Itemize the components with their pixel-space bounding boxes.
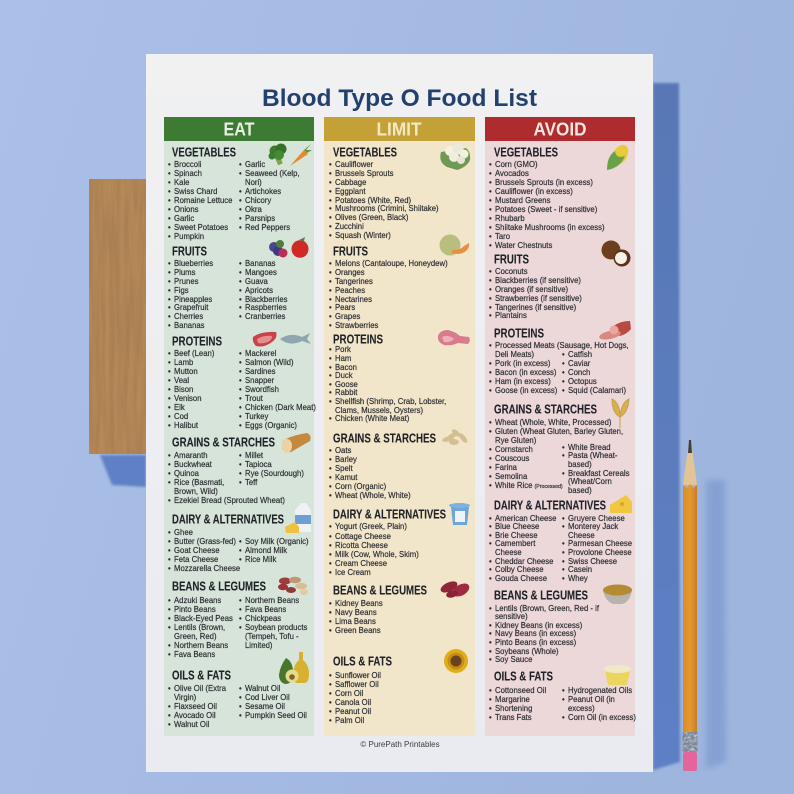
- limit fruits: Strawberries: [335, 320, 379, 330]
- eat proteins: Snapper: [245, 375, 274, 385]
- eat dairy and alternatives: Ghee: [174, 527, 193, 537]
- limit dairy and alternatives: Yogurt (Greek, Plain): [335, 521, 407, 531]
- eat beans and legumes: Soybean products: [245, 622, 307, 632]
- limit grains and starches: Oats: [335, 445, 352, 455]
- avoid beans and legumes: Pinto Beans (in excess): [495, 637, 576, 647]
- eat proteins: Salmon (Wild): [245, 357, 294, 367]
- limit beans and legumes: Green Beans: [335, 625, 381, 635]
- eat grains and starches: Millet: [245, 450, 263, 460]
- avoid vegetables: Cauliflower (in excess): [495, 186, 573, 196]
- icon: margarine tub: [602, 663, 632, 686]
- eat proteins: Bison: [174, 384, 193, 394]
- eat fruits: Blueberries: [174, 258, 213, 268]
- limit oils and fats: Corn Oil: [335, 688, 364, 698]
- eat vegetables: Chicory: [245, 195, 271, 205]
- eat proteins: Veal: [174, 375, 189, 385]
- limit vegetables: Brussels Sprouts: [335, 168, 394, 178]
- avoid dairy and alternatives: Blue Cheese: [495, 521, 539, 531]
- eat oils and fats: Cod Liver Oil: [245, 692, 290, 702]
- avoid beans and legumes: Soybeans (Whole): [495, 646, 559, 656]
- eat grains and starches: Quinoa: [174, 468, 199, 478]
- eat grains and starches: Ezekiel Bread (Sprouted Wheat): [174, 495, 285, 505]
- limit grains and starches: Spelt: [335, 463, 353, 473]
- limit proteins: Ham: [335, 353, 352, 363]
- limit vegetables: Zucchini: [335, 221, 364, 231]
- eat proteins: [168, 332, 316, 430]
- limit fruits: Tangerines: [335, 276, 373, 286]
- avoid grains and starches: GRAINS & STARCHES: [494, 402, 597, 416]
- limit grains and starches: [329, 429, 468, 500]
- avoid beans and legumes: Kidney Beans (in excess): [495, 620, 582, 630]
- avoid proteins: Catfish: [568, 349, 592, 359]
- icon: cheese wedge: [609, 494, 633, 514]
- footer credit: © PurePath Printables: [360, 740, 440, 749]
- avoid grains and starches: Semolina: [495, 471, 527, 481]
- wood block shadow: [100, 455, 146, 487]
- avoid vegetables: VEGETABLES: [494, 146, 558, 160]
- avoid fruits: FRUITS: [494, 252, 529, 266]
- eat dairy and alternatives: [168, 503, 311, 573]
- avoid fruits: Coconuts: [495, 266, 528, 276]
- eat beans and legumes: Pinto Beans: [174, 604, 215, 614]
- limit oils and fats: Safflower Oil: [335, 679, 379, 689]
- limit oils and fats: Peanut Oil: [335, 706, 371, 716]
- panel: avoid: [485, 117, 635, 736]
- limit proteins: Shellfish (Shrimp, Crab, Lobster,: [335, 396, 447, 406]
- avoid dairy and alternatives: [485, 497, 635, 585]
- avoid fruits: Strawberries (if sensitive): [495, 293, 582, 303]
- eat grains and starches: Brown, Wild): [174, 486, 218, 496]
- avoid beans and legumes: [485, 587, 635, 665]
- eat column content: [168, 144, 316, 729]
- limit proteins: Clams, Mussels, Oysters): [335, 405, 423, 415]
- avoid grains and starches: Breakfast Cereals: [568, 468, 630, 478]
- limit column content: [329, 144, 470, 725]
- eat header band: [164, 117, 314, 141]
- limit beans and legumes: Navy Beans: [335, 607, 377, 617]
- eat proteins: Swordfish: [245, 384, 279, 394]
- avoid oils and fats: Margarine: [495, 694, 530, 704]
- limit vegetables: Olives (Green, Black): [335, 212, 409, 222]
- avoid grains and starches: based): [568, 485, 592, 495]
- limit fruits: Oranges: [335, 267, 365, 277]
- icon: avocado and oil bottle: [279, 652, 309, 684]
- avoid oils and fats: Corn Oil (in excess): [568, 712, 636, 722]
- panel: eat: [164, 117, 314, 736]
- wooden block: [89, 179, 146, 454]
- avoid proteins: PROTEINS: [494, 326, 544, 340]
- avoid vegetables: [489, 144, 628, 250]
- icon: pork cut: [438, 330, 470, 346]
- eat proteins: Halibut: [174, 420, 198, 430]
- eat beans and legumes: Black-Eyed Peas: [174, 613, 233, 623]
- eat vegetables: [168, 144, 312, 241]
- eat fruits: Apricots: [245, 285, 273, 295]
- avoid column content: [489, 144, 636, 722]
- eat proteins: Mutton: [174, 366, 197, 376]
- limit grains and starches: Corn (Organic): [335, 481, 386, 491]
- avoid proteins: Squid (Calamari): [568, 385, 626, 395]
- avoid fruits: Oranges (if sensitive): [495, 284, 568, 294]
- eat vegetables: Garlic: [174, 213, 194, 223]
- eat proteins: Venison: [174, 393, 201, 403]
- eat proteins: Turkey: [245, 411, 268, 421]
- avoid vegetables: Taro: [495, 231, 510, 241]
- eat fruits: [168, 237, 308, 330]
- avoid dairy and alternatives: Provolone Cheese: [568, 547, 632, 557]
- limit proteins: [329, 330, 470, 423]
- avoid proteins: Pork (in excess): [495, 358, 550, 368]
- eat grains and starches: Teff: [245, 477, 257, 487]
- panel: limit: [324, 117, 475, 736]
- title: Blood Type O Food List: [262, 85, 537, 112]
- avoid grains and starches: Couscous: [495, 453, 529, 463]
- avoid grains and starches: White Rice (Processed): [495, 480, 563, 490]
- eat vegetables: Red Peppers: [245, 222, 290, 232]
- eat grains and starches: GRAINS & STARCHES: [172, 436, 275, 450]
- avoid fruits: Tangerines (if sensitive): [495, 302, 576, 312]
- eat beans and legumes: Lentils (Brown,: [174, 622, 225, 632]
- eat grains and starches: Amaranth: [174, 450, 207, 460]
- eat fruits: Grapefruit: [174, 302, 208, 312]
- eat vegetables: Spinach: [174, 168, 202, 178]
- eat oils and fats: Walnut Oil: [245, 683, 280, 693]
- limit vegetables: Cauliflower: [335, 159, 374, 169]
- eat dairy and alternatives: Mozzarella Cheese: [174, 563, 240, 573]
- eat oils and fats: Sesame Oil: [245, 701, 285, 711]
- eat header band: EAT: [224, 120, 254, 140]
- avoid dairy and alternatives: Gouda Cheese: [495, 573, 547, 583]
- icon: cauliflower: [440, 144, 470, 170]
- icon: yogurt cup: [449, 503, 470, 525]
- avoid grains and starches: (Wheat/Corn: [568, 476, 612, 486]
- eat dairy and alternatives: Almond Milk: [245, 545, 287, 555]
- limit grains and starches: Wheat (Whole, White): [335, 490, 411, 500]
- avoid vegetables: Shiitake Mushrooms (in excess): [495, 222, 605, 232]
- limit oils and fats: Sunflower Oil: [335, 670, 381, 680]
- eat beans and legumes: Northern Beans: [245, 595, 299, 605]
- avoid grains and starches: Pasta (Wheat-: [568, 450, 618, 460]
- eat oils and fats: OILS & FATS: [172, 668, 231, 682]
- avoid vegetables: Mustard Greens: [495, 195, 550, 205]
- avoid oils and fats: Cottonseed Oil: [495, 685, 546, 695]
- eat vegetables: VEGETABLES: [172, 146, 236, 160]
- avoid vegetables: Corn (GMO): [495, 159, 538, 169]
- avoid dairy and alternatives: American Cheese: [495, 513, 556, 523]
- eat proteins: Eggs (Organic): [245, 420, 297, 430]
- icon: assorted beans: [278, 576, 308, 595]
- avoid fruits: Plantains: [495, 310, 527, 320]
- eat fruits: Figs: [174, 285, 188, 295]
- limit header band: LIMIT: [376, 120, 422, 140]
- icon: corn: [607, 144, 628, 170]
- limit proteins: PROTEINS: [333, 332, 383, 346]
- icon: broccoli and carrot: [268, 144, 312, 166]
- limit dairy and alternatives: Milk (Cow, Whole, Skim): [335, 549, 419, 559]
- avoid dairy and alternatives: DAIRY & ALTERNATIVES: [494, 498, 606, 512]
- icon: kidney beans: [440, 581, 470, 598]
- avoid oils and fats: Peanut Oil (in: [568, 694, 615, 704]
- avoid proteins: Caviar: [568, 358, 591, 368]
- avoid dairy and alternatives: Brie Cheese: [495, 530, 538, 540]
- avoid beans and legumes: Lentils (Brown, Green, Red - if: [495, 603, 599, 613]
- icon: processed meat: [599, 321, 631, 340]
- avoid dairy and alternatives: Whey: [568, 573, 588, 583]
- eat oils and fats: Avocado Oil: [174, 710, 215, 720]
- avoid vegetables: Brussels Sprouts (in excess): [495, 177, 593, 187]
- avoid oils and fats: Shortening: [495, 703, 532, 713]
- avoid grains and starches: based): [568, 459, 592, 469]
- avoid dairy and alternatives: Cheese: [568, 530, 595, 540]
- eat oils and fats: Walnut Oil: [174, 719, 209, 729]
- limit proteins: Chicken (White Meat): [335, 413, 410, 423]
- eat fruits: Pineapples: [174, 294, 212, 304]
- limit beans and legumes: Kidney Beans: [335, 598, 383, 608]
- eat proteins: Trout: [245, 393, 263, 403]
- avoid beans and legumes: BEANS & LEGUMES: [494, 588, 588, 602]
- eat grains and starches: [168, 433, 311, 505]
- limit grains and starches: Barley: [335, 454, 357, 464]
- eat grains and starches: Rye (Sourdough): [245, 468, 304, 478]
- avoid oils and fats: Trans Fats: [495, 712, 532, 722]
- avoid fruits: [489, 240, 630, 320]
- eat vegetables: Nori): [245, 177, 262, 187]
- limit grains and starches: GRAINS & STARCHES: [333, 432, 436, 446]
- eat vegetables: Parsnips: [245, 213, 275, 223]
- avoid dairy and alternatives: Colby Cheese: [495, 564, 544, 574]
- avoid proteins: Conch: [568, 367, 591, 377]
- pencil: [682, 440, 698, 771]
- icon: bread loaf: [282, 433, 311, 453]
- limit vegetables: Cabbage: [335, 177, 367, 187]
- icon: melon: [440, 234, 470, 256]
- eat beans and legumes: Chickpeas: [245, 613, 281, 623]
- avoid grains and starches: Gluten (Wheat Gluten, Barley Gluten,: [495, 426, 623, 436]
- avoid oils and fats: Hydrogenated Oils: [568, 685, 632, 695]
- avoid oils and fats: excess): [568, 703, 595, 713]
- eat proteins: Mackerel: [245, 348, 276, 358]
- limit proteins: Pork: [335, 344, 351, 354]
- limit vegetables: Potatoes (White, Red): [335, 195, 411, 205]
- avoid proteins: [489, 321, 631, 395]
- avoid proteins: Bacon (in excess): [495, 367, 556, 377]
- eat proteins: Beef (Lean): [174, 348, 214, 358]
- eat vegetables: Okra: [245, 204, 262, 214]
- limit oils and fats: Palm Oil: [335, 715, 365, 725]
- eat fruits: Cherries: [174, 311, 203, 321]
- avoid header band: [485, 117, 635, 141]
- limit fruits: Pears: [335, 302, 356, 312]
- limit vegetables: [329, 144, 470, 240]
- limit dairy and alternatives: Cottage Cheese: [335, 531, 391, 541]
- avoid oils and fats: OILS & FATS: [494, 670, 553, 684]
- eat fruits: Prunes: [174, 276, 198, 286]
- eat proteins: Sardines: [245, 366, 276, 376]
- avoid dairy and alternatives: Swiss Cheese: [568, 556, 617, 566]
- eat oils and fats: Olive Oil (Extra: [174, 683, 226, 693]
- limit proteins: Duck: [335, 370, 353, 380]
- icon: milk carton and cheese: [285, 503, 311, 533]
- eat beans and legumes: Green, Red): [174, 631, 216, 641]
- paper shadow: [653, 83, 680, 770]
- eat vegetables: Seaweed (Kelp,: [245, 168, 300, 178]
- eat vegetables: Romaine Lettuce: [174, 195, 232, 205]
- avoid dairy and alternatives: Cheddar Cheese: [495, 556, 553, 566]
- avoid header band: AVOID: [534, 120, 586, 140]
- limit beans and legumes: BEANS & LEGUMES: [333, 584, 427, 598]
- limit proteins: Rabbit: [335, 387, 358, 397]
- eat vegetables: Kale: [174, 177, 189, 187]
- icon: wheat: [612, 398, 630, 428]
- eat grains and starches: Tapioca: [245, 459, 272, 469]
- eat vegetables: Artichokes: [245, 186, 281, 196]
- eat beans and legumes: Fava Beans: [174, 649, 215, 659]
- eat fruits: Bananas: [245, 258, 276, 268]
- eat vegetables: Swiss Chard: [174, 186, 217, 196]
- avoid fruits: Blackberries (if sensitive): [495, 275, 581, 285]
- avoid dairy and alternatives: Casein: [568, 564, 592, 574]
- eat fruits: Blackberries: [245, 294, 288, 304]
- eat vegetables: Onions: [174, 204, 198, 214]
- icon: coconut: [602, 240, 630, 266]
- avoid proteins: Deli Meats): [495, 349, 534, 359]
- eat grains and starches: Buckwheat: [174, 459, 212, 469]
- limit dairy and alternatives: DAIRY & ALTERNATIVES: [333, 508, 446, 522]
- avoid oils and fats: [485, 668, 635, 730]
- icon: lentil bowl: [602, 583, 633, 606]
- limit oils and fats: Canola Oil: [335, 697, 371, 707]
- eat proteins: PROTEINS: [172, 335, 222, 349]
- icon: grain pile: [442, 429, 468, 445]
- eat oils and fats: [168, 652, 309, 729]
- limit dairy and alternatives: Cream Cheese: [335, 558, 387, 568]
- eat vegetables: Broccoli: [174, 159, 201, 169]
- avoid dairy and alternatives: Camembert: [495, 538, 535, 548]
- eat dairy and alternatives: Soy Milk (Organic): [245, 536, 309, 546]
- eat dairy and alternatives: Rice Milk: [245, 554, 276, 564]
- eat beans and legumes: Northern Beans: [174, 640, 228, 650]
- icon: sunflower: [444, 649, 468, 673]
- avoid grains and starches: Farina: [495, 462, 517, 472]
- eat fruits: FRUITS: [172, 244, 207, 258]
- avoid proteins: Processed Meats (Sausage, Hot Dogs,: [495, 340, 629, 350]
- avoid beans and legumes: sensitive): [495, 611, 528, 621]
- avoid proteins: Goose (in excess): [495, 385, 557, 395]
- eat grains and starches: Rice (Basmati,: [174, 477, 224, 487]
- eat fruits: Bananas: [174, 320, 204, 330]
- eat proteins: Elk: [174, 402, 184, 412]
- eat dairy and alternatives: Butter (Grass-fed): [174, 536, 236, 546]
- eat beans and legumes: Adzuki Beans: [174, 595, 221, 605]
- eat beans and legumes: BEANS & LEGUMES: [172, 580, 266, 594]
- eat vegetables: Garlic: [245, 159, 265, 169]
- paper sheet: [146, 54, 653, 772]
- eat fruits: Plums: [174, 267, 195, 277]
- avoid vegetables: Potatoes (Sweet - if sensitive): [495, 204, 597, 214]
- limit beans and legumes: [329, 581, 470, 635]
- limit grains and starches: Kamut: [335, 472, 358, 482]
- limit fruits: Peaches: [335, 285, 365, 295]
- avoid grains and starches: Wheat (Whole, White, Processed): [495, 417, 611, 427]
- limit proteins: Goose: [335, 379, 358, 389]
- avoid dairy and alternatives: Gruyere Cheese: [568, 513, 625, 523]
- eat dairy and alternatives: Feta Cheese: [174, 554, 218, 564]
- eat dairy and alternatives: DAIRY & ALTERNATIVES: [172, 513, 284, 527]
- eat beans and legumes: Limited): [245, 640, 273, 650]
- icon: steak and fish: [252, 332, 311, 346]
- eat dairy and alternatives: Goat Cheese: [174, 545, 219, 555]
- avoid grains and starches: [489, 398, 630, 495]
- limit oils and fats: [329, 649, 468, 725]
- limit dairy and alternatives: [329, 503, 470, 577]
- limit oils and fats: OILS & FATS: [333, 655, 392, 669]
- limit fruits: Melons (Cantaloupe, Honeydew): [335, 258, 448, 268]
- eat beans and legumes: [168, 576, 308, 659]
- limit vegetables: Mushrooms (Crimini, Shiitake): [335, 203, 439, 213]
- limit beans and legumes: Lima Beans: [335, 616, 376, 626]
- eat oils and fats: Flaxseed Oil: [174, 701, 217, 711]
- eat fruits: Cranberries: [245, 311, 285, 321]
- eat fruits: Guava: [245, 276, 268, 286]
- eat oils and fats: Pumpkin Seed Oil: [245, 710, 307, 720]
- avoid grains and starches: Rye Gluten): [495, 435, 536, 445]
- limit vegetables: Squash (Winter): [335, 230, 391, 240]
- avoid beans and legumes: Navy Beans (in excess): [495, 628, 576, 638]
- limit fruits: Grapes: [335, 311, 361, 321]
- eat oils and fats: Virgin): [174, 692, 196, 702]
- eat vegetables: Sweet Potatoes: [174, 222, 228, 232]
- eat proteins: Lamb: [174, 357, 193, 367]
- limit header band: [324, 117, 475, 141]
- limit proteins: Bacon: [335, 362, 357, 372]
- avoid vegetables: Avocados: [495, 168, 529, 178]
- avoid beans and legumes: Soy Sauce: [495, 654, 532, 664]
- avoid dairy and alternatives: Cheese: [495, 547, 522, 557]
- eat beans and legumes: (Tempeh, Tofu -: [245, 631, 299, 641]
- eat vegetables: Pumpkin: [174, 231, 204, 241]
- eat beans and legumes: Fava Beans: [245, 604, 286, 614]
- limit vegetables: Eggplant: [335, 186, 366, 196]
- eat fruits: Raspberries: [245, 302, 287, 312]
- eat proteins: Cod: [174, 411, 188, 421]
- avoid proteins: Ham (in excess): [495, 376, 551, 386]
- avoid proteins: Octopus: [568, 376, 597, 386]
- limit fruits: FRUITS: [333, 244, 368, 258]
- limit dairy and alternatives: Ricotta Cheese: [335, 540, 388, 550]
- avoid grains and starches: White Bread: [568, 442, 611, 452]
- eat fruits: Mangoes: [245, 267, 277, 277]
- avoid dairy and alternatives: Parmesan Cheese: [568, 538, 632, 548]
- avoid vegetables: Rhubarb: [495, 213, 525, 223]
- avoid grains and starches: Cornstarch: [495, 444, 533, 454]
- eat proteins: Chicken (Dark Meat): [245, 402, 316, 412]
- pencil shadow: [697, 480, 726, 772]
- limit fruits: Nectarines: [335, 294, 372, 304]
- avoid vegetables: Water Chestnuts: [495, 240, 552, 250]
- limit dairy and alternatives: Ice Cream: [335, 567, 371, 577]
- limit fruits: [329, 234, 470, 330]
- limit vegetables: VEGETABLES: [333, 146, 397, 160]
- avoid dairy and alternatives: Monterey Jack: [568, 521, 619, 531]
- icon: berries and apple: [269, 237, 308, 258]
